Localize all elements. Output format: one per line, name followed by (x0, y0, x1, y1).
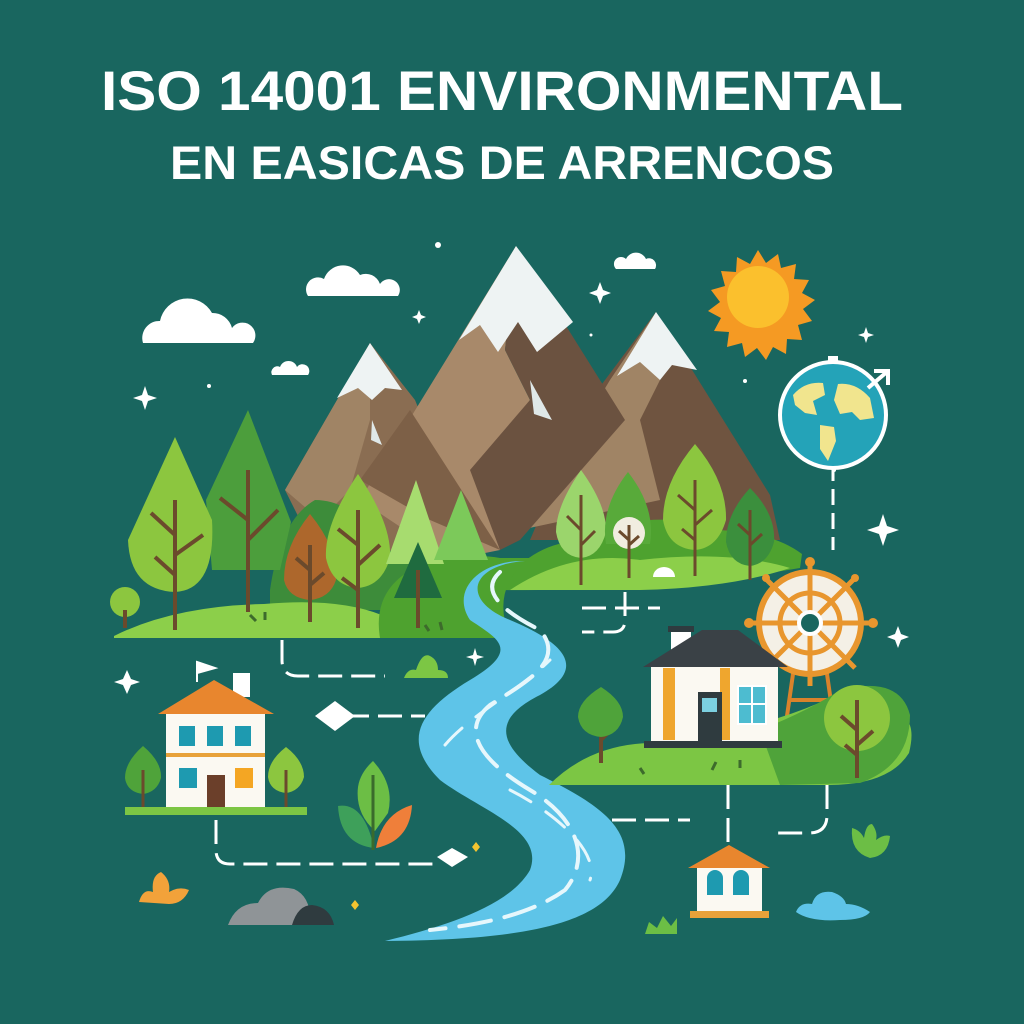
diamond markers (315, 701, 480, 910)
title (101, 59, 903, 189)
sun (708, 250, 815, 360)
plants and small accents (139, 612, 890, 934)
left house (125, 662, 307, 815)
title: EN EASICAS DE ARRENCOS (170, 136, 834, 189)
small right house (688, 845, 770, 918)
title: ISO 14001 ENVIRONMENTAL (101, 59, 903, 122)
rocks (228, 888, 334, 925)
mountains (285, 246, 780, 560)
main house (643, 626, 788, 748)
clouds (142, 253, 656, 375)
left forest (110, 410, 488, 630)
windmill wheel (744, 557, 878, 730)
sparkles (114, 242, 909, 694)
right hill trees (556, 444, 774, 585)
right hill (500, 520, 802, 590)
river (385, 561, 625, 941)
globe (780, 356, 888, 550)
right trees near house (578, 685, 890, 778)
dashed connector paths (216, 592, 827, 864)
left hill (114, 500, 530, 638)
leaf sprout (338, 761, 412, 850)
lower right hill (549, 686, 912, 785)
